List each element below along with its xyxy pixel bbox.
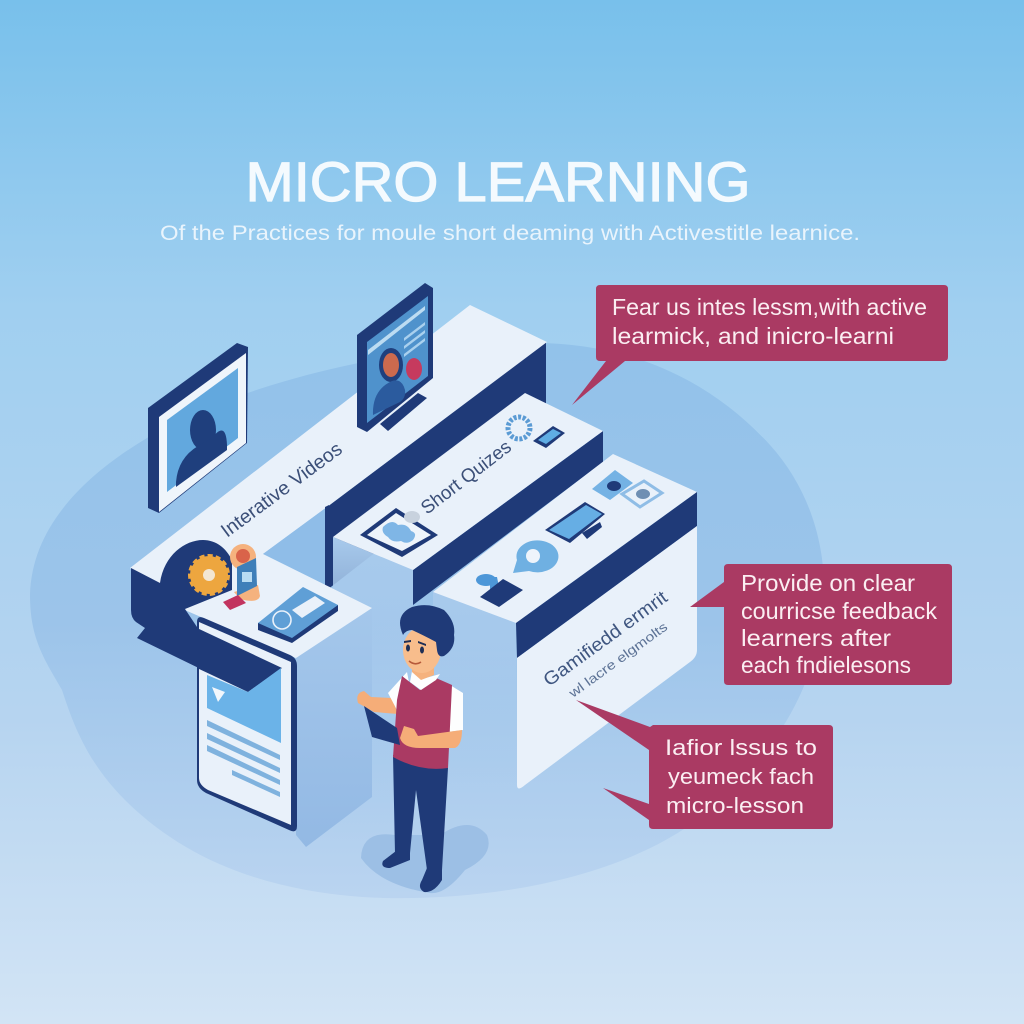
top surface [333,393,603,570]
callout: bottom [576,700,833,829]
platform label: Interative Videos [217,438,347,542]
dark riser band [327,342,546,590]
right arm and hand [400,726,462,748]
lower left block [185,554,372,847]
front panel [517,526,697,788]
block top surface [185,554,372,658]
icon: blue app tablet [258,587,338,643]
subtitle: Of the Practices for moule short deaming with Activestitle learnice. [160,221,860,245]
long top surface [130,305,547,658]
person [357,605,489,893]
icon: quiz card [360,508,438,557]
platform label: Short Quizes [417,437,516,519]
callout: bottom: yeumeck fach [668,764,814,789]
background blob [30,343,824,898]
collar [410,671,440,690]
callout: middle: courricse feedback [741,598,938,624]
callout: bottom: Iafior lssus to [665,735,817,760]
dark band [413,431,603,605]
callout: top [572,285,948,405]
top surface [433,454,697,623]
neck and face [412,660,434,680]
platform: gamified elements [433,454,697,790]
sleeves [436,685,463,733]
callout: middle: each fndielesons [741,652,911,678]
floor gap between platforms [263,507,372,608]
title: MICRO LEARNING [246,150,750,213]
play icon [212,687,225,702]
banner overlap [197,628,282,692]
left face [333,537,413,840]
callout: middle: Provide on clear [741,570,915,596]
callout: middle [690,564,952,685]
callout: top: learmick, and inicro-learni [612,323,894,349]
vest [393,676,452,769]
icon: monitor [545,502,605,543]
icon: gear and phone [508,417,565,448]
eyes and smile [404,640,426,654]
left arm [357,691,398,714]
tablet [364,706,400,745]
platform sublabel: wl lacre elgmolts [565,619,671,701]
platform label: Gamifiedd ermrit [539,586,671,690]
tablet lesson panel [197,617,297,831]
ground shadow [361,825,489,893]
icon: badges [592,470,662,507]
icon: speech bubble [513,540,558,573]
monitor: video call [357,283,433,432]
platform: short quizzes [333,393,603,840]
icon: gear [190,556,228,594]
callout: middle: learners after [741,625,891,651]
shoes [382,851,410,868]
callout: top: Fear us intes lessm,with active [612,294,927,320]
dark banner and dome [131,540,282,692]
video thumbnail [207,668,281,743]
legs [393,755,448,870]
callout: bottom: micro-lesson [666,793,804,818]
dark band [516,492,697,658]
left face [433,592,517,790]
platform: interactive videos [130,305,547,658]
block side face [296,608,372,847]
icon: hand holding card [223,544,260,610]
hair [400,605,454,656]
text lines [207,720,280,797]
icon: stamp and book [476,574,523,607]
monitor: presenter silhouette [148,343,248,513]
